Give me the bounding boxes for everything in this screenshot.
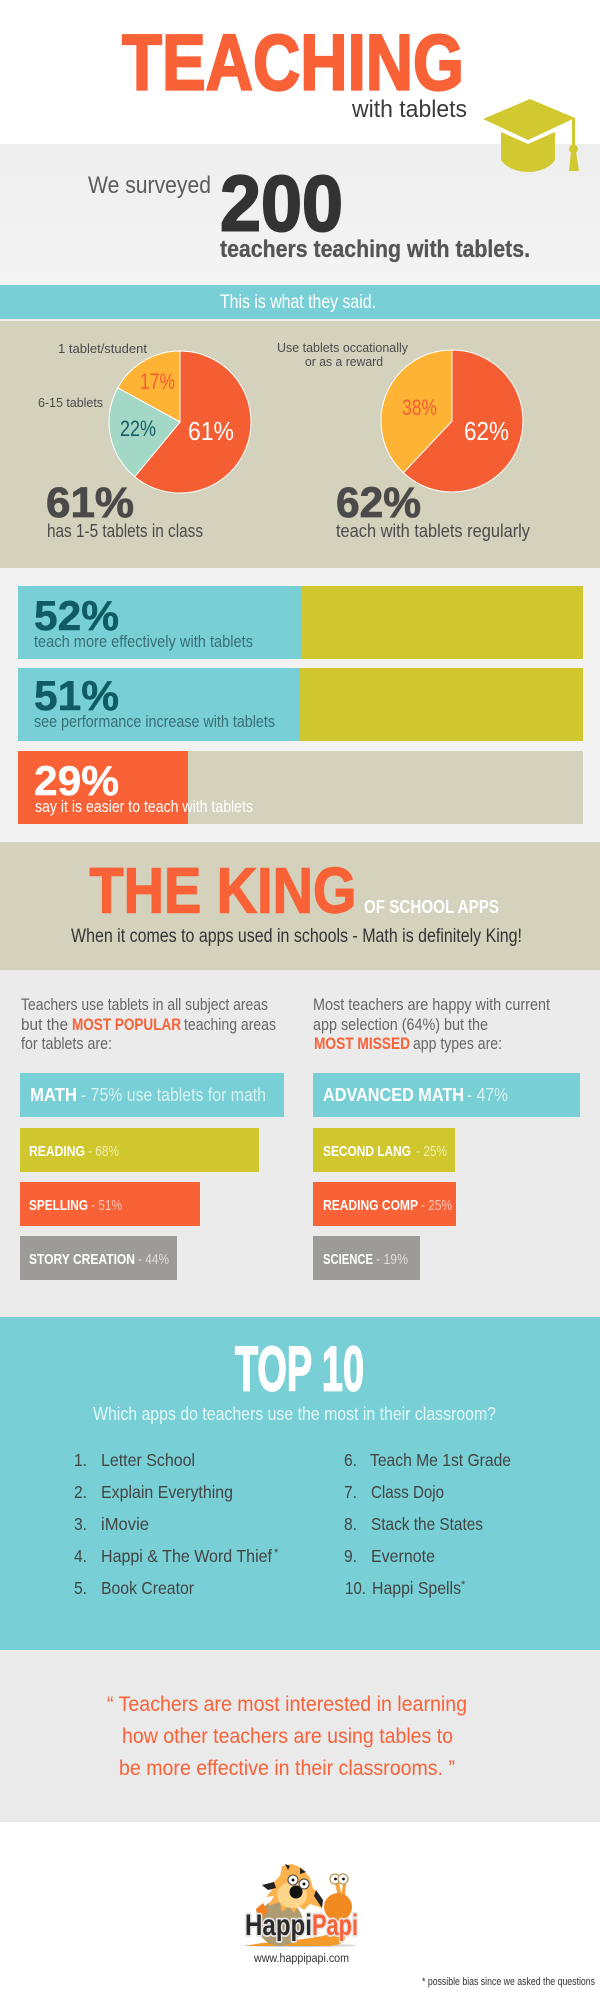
list: apps 6 to 10: 10. (345, 1578, 366, 1598)
value 22%: 22% (120, 416, 156, 441)
stat: 61%: 61% (46, 479, 134, 527)
text: we surveyed: We surveyed (88, 172, 211, 199)
text: most popular intro: but the (21, 1015, 68, 1034)
stat: 62%: 62% (336, 479, 421, 527)
bar: 52% teach more effectively: teach more effectively with tablets (34, 632, 253, 651)
heading: the king: THE KING (90, 854, 356, 926)
text: most popular intro: for tablets are: (21, 1034, 112, 1053)
bar: story creation 44% (20, 1236, 177, 1280)
text: which apps question: Which apps do teachers use the most in their classroom? (93, 1403, 496, 1424)
bar: advanced math 47%: - 47% (467, 1084, 508, 1105)
icon: tiger (262, 1864, 323, 1913)
bar: reading comp 25%: READING COMP (323, 1197, 418, 1214)
list: apps 1 to 5: Explain Everything (101, 1482, 233, 1502)
bar: science 19%: SCIENCE (323, 1251, 373, 1268)
bar: reading 68%: - 68% (88, 1143, 119, 1160)
text: most missed intro: Most teachers are happy with current (313, 995, 550, 1014)
list: apps 6 to 10: 9. (344, 1546, 357, 1566)
list: apps 6 to 10: 7. (344, 1482, 357, 1502)
list: apps 1 to 5: 5. (74, 1578, 87, 1598)
text: most missed intro: app types are: (413, 1034, 502, 1053)
list: apps 6 to 10: 6. (344, 1450, 357, 1470)
bar: advanced math 47% (313, 1073, 580, 1117)
bar: second lang 25% (313, 1128, 455, 1172)
panel: effectiveness bars (0, 568, 600, 842)
list: apps 6 to 10 (344, 1450, 511, 1598)
list: apps 6 to 10: * (461, 1579, 466, 1591)
text: most popular intro: MOST POPULAR (72, 1015, 181, 1034)
title: TEACHING (122, 18, 464, 106)
panel: top 10 (0, 1317, 600, 1650)
bar: reading 68%: READING (29, 1143, 85, 1160)
bar: 51% see performance increase (18, 668, 583, 741)
list: apps 1 to 5: 3. (74, 1514, 87, 1534)
logo wordmark: Papi (312, 1909, 358, 1942)
list: apps 6 to 10: 8. (344, 1514, 357, 1534)
bar: advanced math 47%: ADVANCED MATH (323, 1084, 464, 1105)
bar: science 19% (313, 1236, 420, 1280)
big number 200: 200 (220, 158, 343, 248)
text: most popular intro: teaching areas (184, 1015, 276, 1034)
bar: math 75%: MATH (30, 1084, 77, 1105)
icon: graduation cap (483, 99, 579, 172)
bar: 51% see performance increase: 51% (34, 672, 119, 719)
bar: spelling 51% (20, 1182, 200, 1226)
label: 6-15 tablets: 6-15 tablets (38, 395, 103, 410)
list: apps 1 to 5 (74, 1450, 279, 1598)
quote text: how other teachers are using tables to (122, 1724, 453, 1748)
bar: science 19%: - 19% (376, 1251, 408, 1268)
text: teachers teaching with tablets: teachers teaching with tablets. (220, 236, 530, 263)
list: apps 1 to 5: * (274, 1547, 279, 1559)
label: occasional use: or as a reward (305, 354, 383, 369)
list: apps 6 to 10: Stack the States (371, 1514, 483, 1534)
quote text: “ Teachers are most interested in learning (107, 1692, 467, 1716)
text: most popular intro (21, 995, 276, 1053)
panel: pie charts (0, 319, 600, 568)
bar: spelling 51%: - 51% (91, 1197, 122, 1214)
text: most missed intro (313, 995, 550, 1053)
bar: 29% easier to teach (18, 751, 583, 824)
quote text (107, 1692, 467, 1780)
bar: 51% see performance increase: see performance increase with tablets (34, 712, 275, 731)
list: apps 1 to 5: 1. (74, 1450, 87, 1470)
list: apps 1 to 5: iMovie (101, 1514, 149, 1534)
logo: HappiPapi (244, 1864, 358, 1947)
bar: 52% teach more effectively: 52% (34, 592, 119, 639)
pie chart: tablets in class (109, 351, 251, 493)
list: apps 1 to 5: 2. (74, 1482, 87, 1502)
list: apps 1 to 5: 4. (74, 1546, 87, 1566)
bar: spelling 51%: SPELLING (29, 1197, 88, 1214)
list: apps 6 to 10: Happi Spells (372, 1578, 461, 1598)
subheading: of school apps: OF SCHOOL APPS (364, 897, 499, 917)
bar: story creation 44%: STORY CREATION (29, 1251, 135, 1268)
value 38%: 38% (402, 395, 437, 420)
list: apps 1 to 5: Letter School (101, 1450, 195, 1470)
list: apps 1 to 5: Happi & The Word Thief (101, 1546, 272, 1566)
bar: math 75%: - 75% use tablets for math (81, 1084, 266, 1105)
label: occasional use (277, 340, 408, 369)
bar: math 75% (20, 1073, 284, 1117)
text: website url: www.happipapi.com (253, 1953, 349, 1965)
banner: this is what they said: This is what they said. (220, 291, 376, 313)
bar: reading 68% (20, 1128, 259, 1172)
caption: has 1-5 tablets: has 1-5 tablets in class (47, 520, 203, 541)
logo wordmark: Happi (245, 1909, 312, 1942)
icon: snail body (244, 1900, 356, 1947)
label: 1 tablet per student: 1 tablet/student (58, 341, 147, 356)
panel: survey intro (0, 144, 600, 285)
bar: reading comp 25% (313, 1182, 456, 1226)
icon: snail head (324, 1874, 352, 1921)
bar: 29% easier to teach: say it is easier to teach with tablets (35, 797, 253, 816)
value 61%: 61% (188, 416, 234, 446)
value 62%: 62% (464, 416, 509, 446)
pie chart: teaching regularly (381, 350, 523, 492)
subtitle: with tablets (351, 96, 467, 123)
heading: top 10: TOP 10 (235, 1334, 364, 1404)
quote text: be more effective in their classrooms. ” (119, 1756, 455, 1780)
panel: subject areas (0, 970, 600, 1317)
bar: second lang 25%: SECOND LANG (323, 1143, 411, 1160)
text: math is king: When it comes to apps used in schools - Math is definitely King! (71, 926, 522, 947)
panel: header (122, 18, 467, 123)
list: apps 6 to 10: Class Dojo (371, 1482, 444, 1502)
bar: story creation 44%: - 44% (138, 1251, 169, 1268)
bar: reading comp 25%: - 25% (421, 1197, 452, 1214)
value 17%: 17% (140, 369, 175, 394)
text: most popular intro: Teachers use tablets in all subject areas (21, 995, 268, 1014)
bar: 29% easier to teach: 29% (34, 757, 119, 804)
bar: 52% teach more effectively (18, 586, 583, 659)
text: most missed intro: app selection (64%) but the (313, 1015, 488, 1034)
list: apps 6 to 10: Teach Me 1st Grade (370, 1450, 511, 1470)
caption: teach regularly: teach with tablets regularly (336, 520, 531, 541)
label: occasional use: Use tablets occationally (277, 340, 408, 355)
bar: second lang 25%: - 25% (416, 1143, 447, 1160)
list: apps 1 to 5: Book Creator (101, 1578, 194, 1598)
panel: quote (0, 1650, 600, 1822)
text: most missed intro: MOST MISSED (314, 1034, 410, 1053)
panel: the king (0, 842, 600, 970)
list: apps 6 to 10: Evernote (371, 1546, 435, 1566)
banner: this is what they said (0, 285, 600, 319)
